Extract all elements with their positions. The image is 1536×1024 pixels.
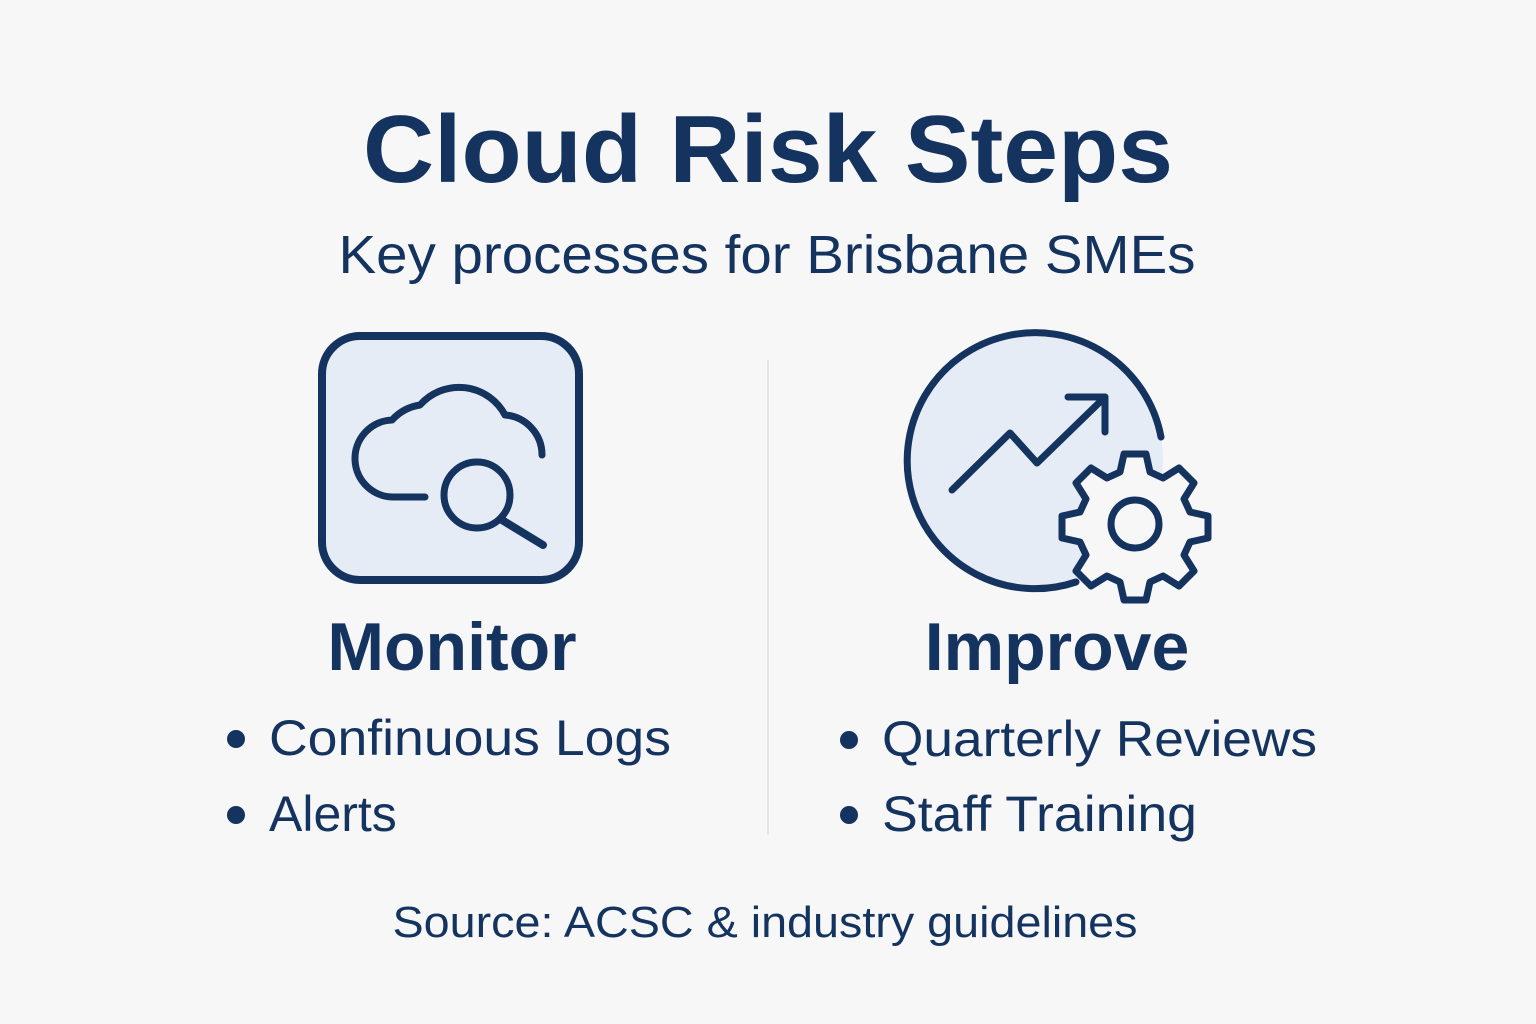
bullet list: improve: [840, 711, 1317, 842]
bullet list: improve: Staff Training: [882, 786, 1197, 842]
bullet list: monitor: Confinuous Logs: [269, 710, 671, 766]
bullet list: improve: Quarterly Reviews: [882, 711, 1317, 767]
subtitle: Key processes for Brisbane SMEs: [338, 225, 1196, 285]
heading: Improve: Improve: [925, 609, 1189, 685]
panel: improve: [840, 332, 1317, 842]
heading: Monitor: Monitor: [327, 609, 577, 685]
title: Cloud Risk Steps: [363, 96, 1173, 203]
panel: monitor: [227, 336, 671, 842]
icon: cloud with magnifier: [322, 336, 579, 580]
bullet list: monitor: [227, 710, 671, 842]
icon: trend chart with gear: [907, 332, 1208, 600]
bullet list: monitor: Alerts: [269, 786, 397, 842]
source note: Source: ACSC & industry guidelines: [392, 898, 1138, 947]
